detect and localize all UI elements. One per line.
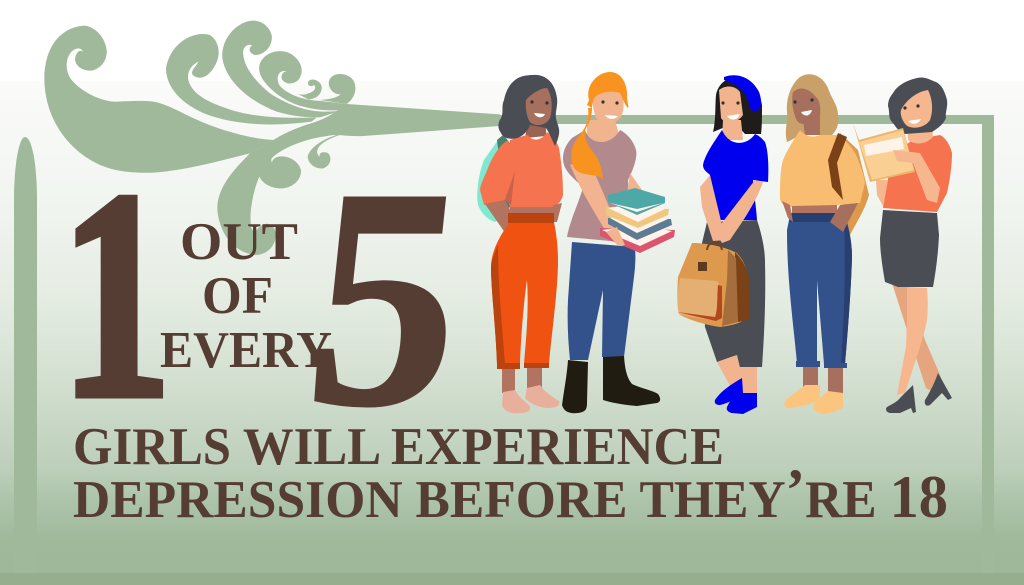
frame: green border bars bbox=[14, 115, 994, 573]
text: EVERY: EVERY bbox=[160, 322, 332, 379]
line 2: DEPRESSION BEFORE THEY bbox=[73, 471, 805, 529]
icon: stack of books bbox=[600, 188, 675, 253]
ornament: green flourish bbox=[44, 21, 500, 255]
person 5: curly-haired girl in skirt with folder bbox=[853, 77, 952, 413]
person 3: girl in blue with backpack bbox=[677, 75, 768, 414]
line 1: GIRLS WILL EXPERIENCE bbox=[73, 418, 724, 476]
person 1: girl in orange trousers bbox=[477, 75, 563, 413]
person 4: blonde girl in yellow bbox=[780, 74, 869, 414]
line 2: RE bbox=[805, 471, 890, 529]
person 2: red-haired girl with books and boots bbox=[562, 72, 675, 413]
numeral 5: 5 bbox=[295, 124, 477, 471]
headline: 1 out of every 5 bbox=[60, 124, 477, 471]
subheading bbox=[73, 418, 948, 530]
text: OUT: OUT bbox=[180, 213, 298, 271]
icon: open folder bbox=[853, 123, 915, 182]
numeral 1: 1 bbox=[60, 130, 172, 460]
line 2: 18 bbox=[890, 464, 948, 530]
text: OF: OF bbox=[202, 267, 273, 325]
line 2: ’ bbox=[786, 457, 805, 523]
icon: tan backpack bbox=[677, 242, 749, 327]
